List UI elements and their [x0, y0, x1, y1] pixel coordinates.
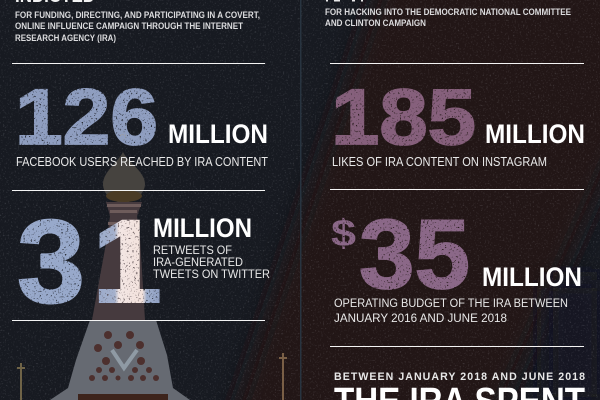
caption: retweets: TWEETS ON TWITTER	[153, 267, 270, 281]
caption: retweets: IRA-GENERATED	[153, 255, 243, 269]
icon: tower drum	[92, 202, 145, 320]
stat: 35 million budget	[331, 199, 582, 325]
caption: operating budget: JANUARY 2016 AND JUNE 2018	[334, 311, 507, 325]
stat: 31 million retweets	[17, 196, 270, 328]
text block: IRA spending intro: BETWEEN JANUARY 2018 AND JUNE 2018	[334, 371, 585, 383]
number: 35: 35	[359, 199, 470, 309]
stat: 185 million Instagram likes	[331, 72, 585, 169]
number: 126: 126	[15, 72, 158, 161]
symbol: dollar sign: $	[331, 213, 356, 255]
icon: dome golden band	[106, 190, 142, 202]
caption: operating budget: OPERATING BUDGET OF THE IRA BETWEEN	[334, 296, 568, 310]
heading: clipped right title marks	[326, 0, 363, 2]
icon: right spire	[279, 353, 287, 400]
icon: roof diamond pattern	[89, 331, 159, 381]
icon: tower stripes	[107, 204, 141, 232]
number: 185: 185	[331, 72, 476, 161]
label: million: MILLION	[153, 213, 252, 243]
icon: onion dome	[103, 152, 145, 203]
text block: left indictment description	[15, 10, 260, 43]
caption: operating budget	[334, 296, 568, 325]
panel: left column statistics	[12, 0, 270, 328]
icon: patterned spire roof	[50, 320, 190, 400]
icon: left spire	[17, 363, 25, 400]
caption: retweets: RETWEETS OF	[153, 243, 232, 257]
caption: retweets	[153, 243, 270, 281]
text block: left indictment description: RESEARCH AGENCY (IRA)	[15, 33, 116, 43]
panel: right column statistics	[325, 0, 585, 400]
text block: right indictment description: AND CLINTON CAMPAIGN	[325, 18, 426, 28]
icon: roof light chevron	[112, 350, 137, 368]
icon: golden finial	[120, 132, 126, 140]
text block: right indictment description: FOR HACKING INTO THE DEMOCRATIC NATIONAL COMMITTEE	[325, 7, 571, 17]
number: 3: 3	[17, 196, 85, 328]
caption: Instagram likes: LIKES OF IRA CONTENT ON INSTAGRAM	[332, 155, 547, 169]
number: 1: 1	[92, 196, 162, 328]
label: million: MILLION	[168, 119, 268, 149]
icon: roof base band	[78, 394, 168, 400]
text block: left indictment description: ONLINE INFLUENCE CAMPAIGN THROUGH THE INTERNET	[15, 21, 243, 31]
label: million: MILLION	[485, 119, 585, 149]
text block: right indictment description	[325, 7, 571, 28]
illustration: onion-dome cathedral tower	[17, 132, 287, 400]
stat: 126 million Facebook users	[15, 72, 268, 169]
label: million: MILLION	[482, 262, 582, 292]
text block: left indictment description: FOR FUNDING, DIRECTING, AND PARTICIPATING IN A COVERT,	[15, 10, 260, 20]
caption: Facebook users: FACEBOOK USERS REACHED BY IRA CONTENT	[16, 155, 268, 169]
